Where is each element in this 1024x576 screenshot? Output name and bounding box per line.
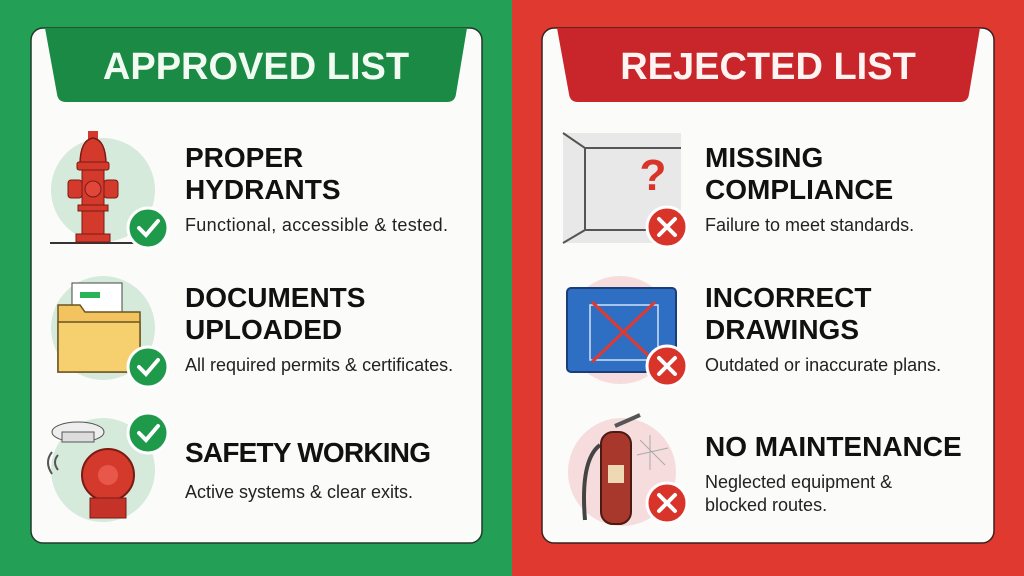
- heading: approved list: [45, 28, 467, 102]
- heading: rejected list: REJECTED LIST: [620, 46, 916, 88]
- item: incorrect drawings: DRAWINGS: [705, 314, 859, 345]
- icon: alarm bell and detector: [48, 418, 155, 522]
- item: incorrect drawings: INCORRECT: [705, 282, 871, 313]
- icon: empty room with question mark: [563, 133, 681, 243]
- item: proper hydrants: Functional, accessible & tested.: [185, 215, 448, 235]
- icon: empty room with question mark: ?: [640, 151, 666, 200]
- item: missing compliance: COMPLIANCE: [705, 174, 893, 205]
- icon: check badge: [128, 347, 168, 387]
- item: no maintenance: blocked routes.: [705, 495, 827, 515]
- heading: approved list: APPROVED LIST: [103, 46, 409, 88]
- icon: fire hydrant: [50, 131, 155, 243]
- item: no maintenance: [568, 415, 962, 526]
- item: documents uploaded: UPLOADED: [185, 314, 342, 345]
- icon: x badge: [647, 346, 687, 386]
- item: safety working: Active systems & clear exits.: [185, 482, 413, 502]
- item: proper hydrants: HYDRANTS: [185, 174, 341, 205]
- item: missing compliance: [563, 133, 914, 247]
- item: proper hydrants: PROPER: [185, 142, 303, 173]
- item: safety working: SAFETY WORKING: [185, 437, 431, 468]
- item: safety working: [48, 413, 431, 522]
- panel: rejected list: [542, 28, 994, 543]
- icon: x badge: [647, 207, 687, 247]
- item: no maintenance: NO MAINTENANCE: [705, 431, 962, 462]
- item: no maintenance: Neglected equipment &: [705, 472, 892, 492]
- item: incorrect drawings: Outdated or inaccurate plans.: [705, 355, 941, 375]
- icon: check badge: [128, 208, 168, 248]
- item: documents uploaded: [51, 276, 453, 387]
- panel: approved list: [31, 28, 482, 543]
- icon: x badge: [647, 483, 687, 523]
- item: documents uploaded: DOCUMENTS: [185, 282, 365, 313]
- icon: crossed blueprint: [566, 276, 676, 384]
- item: missing compliance: MISSING: [705, 142, 823, 173]
- icon: folder: [51, 276, 155, 380]
- icon: rusty extinguisher: [568, 415, 676, 526]
- icon: check badge: [128, 413, 168, 453]
- heading: rejected list: [557, 28, 980, 102]
- item: missing compliance: Failure to meet standards.: [705, 215, 914, 235]
- item: proper hydrants: [50, 131, 448, 248]
- item: documents uploaded: All required permits & certificates.: [185, 355, 453, 375]
- item: incorrect drawings: [566, 276, 941, 386]
